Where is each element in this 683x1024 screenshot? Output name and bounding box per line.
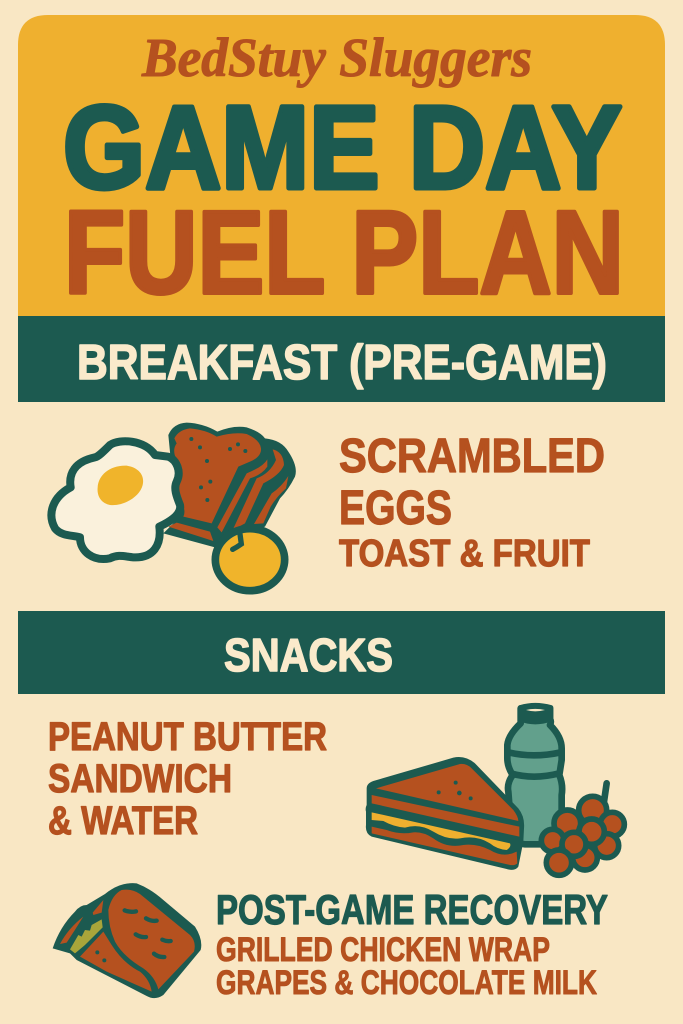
text block: breakfast menu: TOAST & FRUIT (339, 533, 590, 575)
text block: breakfast menu (339, 430, 605, 575)
title: game day: GAME DAY (63, 82, 622, 214)
panel: header (18, 15, 665, 319)
heading: team name: BedStuy Sluggers (141, 27, 532, 88)
heading: breakfast: BREAKFAST (PRE-GAME) (77, 336, 607, 390)
text block: breakfast menu: EGGS (339, 482, 452, 535)
text block: snack menu (48, 715, 327, 843)
icon: grilled chicken wrap (53, 883, 201, 998)
panel: snacks banner (18, 611, 665, 694)
panel: breakfast banner (18, 316, 665, 402)
text block: breakfast menu: SCRAMBLED (339, 430, 605, 483)
icon: egg, toast and fruit (51, 423, 296, 591)
icon: sandwich, water bottle and grapes (366, 705, 624, 875)
text block: snack menu: & WATER (48, 799, 198, 843)
text block: post-game recovery: GRILLED CHICKEN WRAP (216, 931, 550, 969)
heading: snacks: SNACKS (224, 629, 393, 681)
text block: post-game recovery (216, 886, 608, 1002)
text block: snack menu: PEANUT BUTTER (48, 715, 327, 759)
text block: snack menu: SANDWICH (48, 757, 232, 801)
